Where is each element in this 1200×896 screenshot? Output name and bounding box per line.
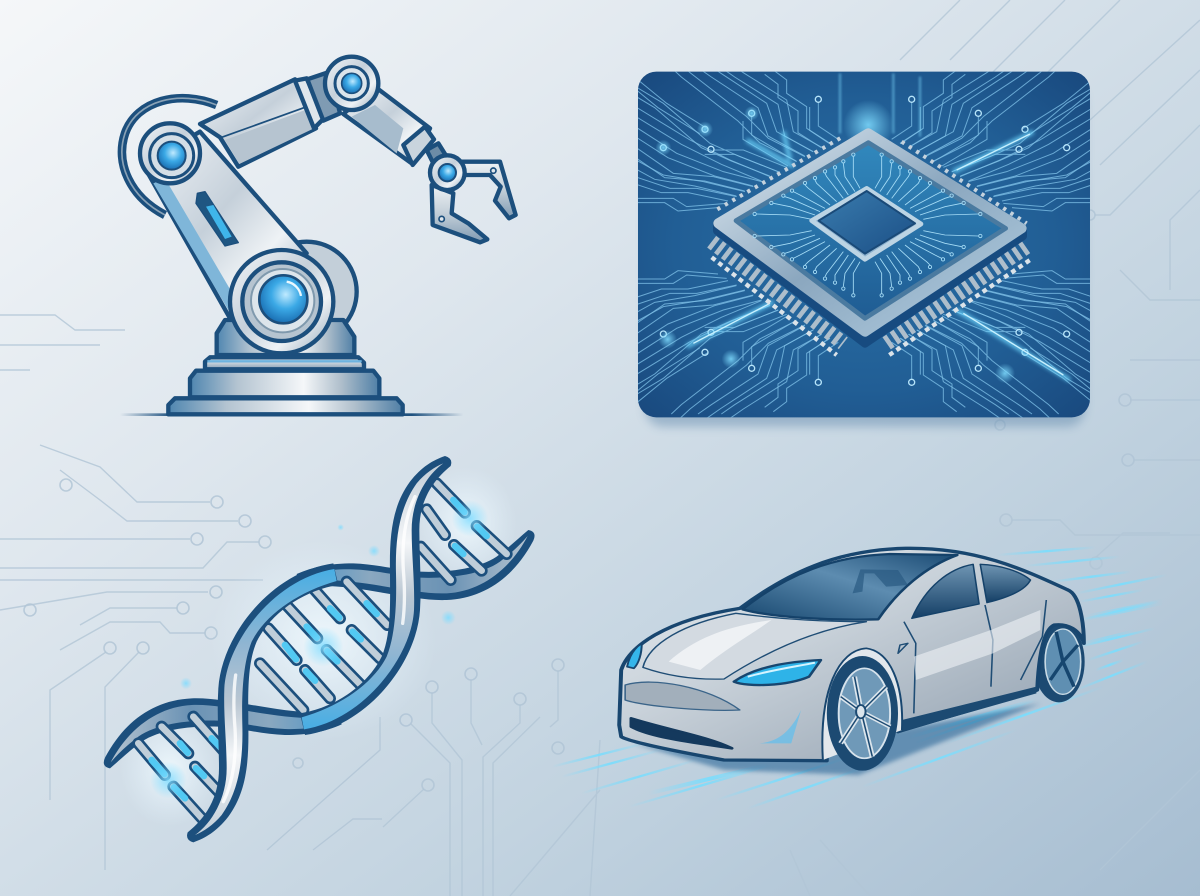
glow behind helix: [120, 467, 517, 827]
glow spots: [150, 500, 488, 798]
panel background: [638, 72, 1090, 417]
car body: [619, 548, 1084, 761]
front wheel: [822, 648, 902, 771]
gripper: [430, 155, 516, 242]
chip inner board: [736, 143, 1006, 318]
icon: dna helix: [104, 456, 535, 842]
lower grille: [631, 718, 732, 748]
chip inner traces: [753, 153, 982, 297]
rear wheel: [1033, 621, 1085, 702]
sill: [902, 687, 1036, 732]
chip pins: [712, 137, 1030, 355]
front bumper intake: [625, 682, 740, 710]
ground line: [120, 413, 463, 416]
side highlight: [914, 610, 1040, 680]
chip die: [812, 188, 921, 259]
base pairs: [138, 483, 507, 821]
background circuit nodes: [24, 210, 1134, 791]
shoulder joint: [140, 123, 200, 183]
cable: [122, 98, 217, 215]
seats: [853, 569, 908, 593]
car shadow: [633, 703, 1040, 775]
elbow joint: [325, 57, 378, 110]
icon: electric car: [552, 547, 1167, 808]
speed lines: [552, 547, 1167, 808]
panel shadow: [645, 83, 1085, 427]
main joint: [230, 250, 333, 353]
chip body: [717, 133, 1023, 343]
circuit traces: [621, 63, 1109, 418]
pedestal: [168, 320, 403, 414]
door lines: [898, 600, 1046, 713]
upper arm: [200, 72, 340, 167]
hood: [643, 613, 866, 679]
windshield: [743, 554, 957, 620]
rear housing: [257, 242, 357, 342]
lower arm: [143, 132, 307, 318]
panel: microchip: [621, 63, 1109, 427]
icon: robot arm: [120, 57, 516, 416]
side windows: [912, 564, 1030, 618]
front strands: [187, 456, 451, 842]
forearm: [343, 87, 447, 167]
headlights: [627, 643, 821, 685]
back strands: [104, 530, 535, 768]
